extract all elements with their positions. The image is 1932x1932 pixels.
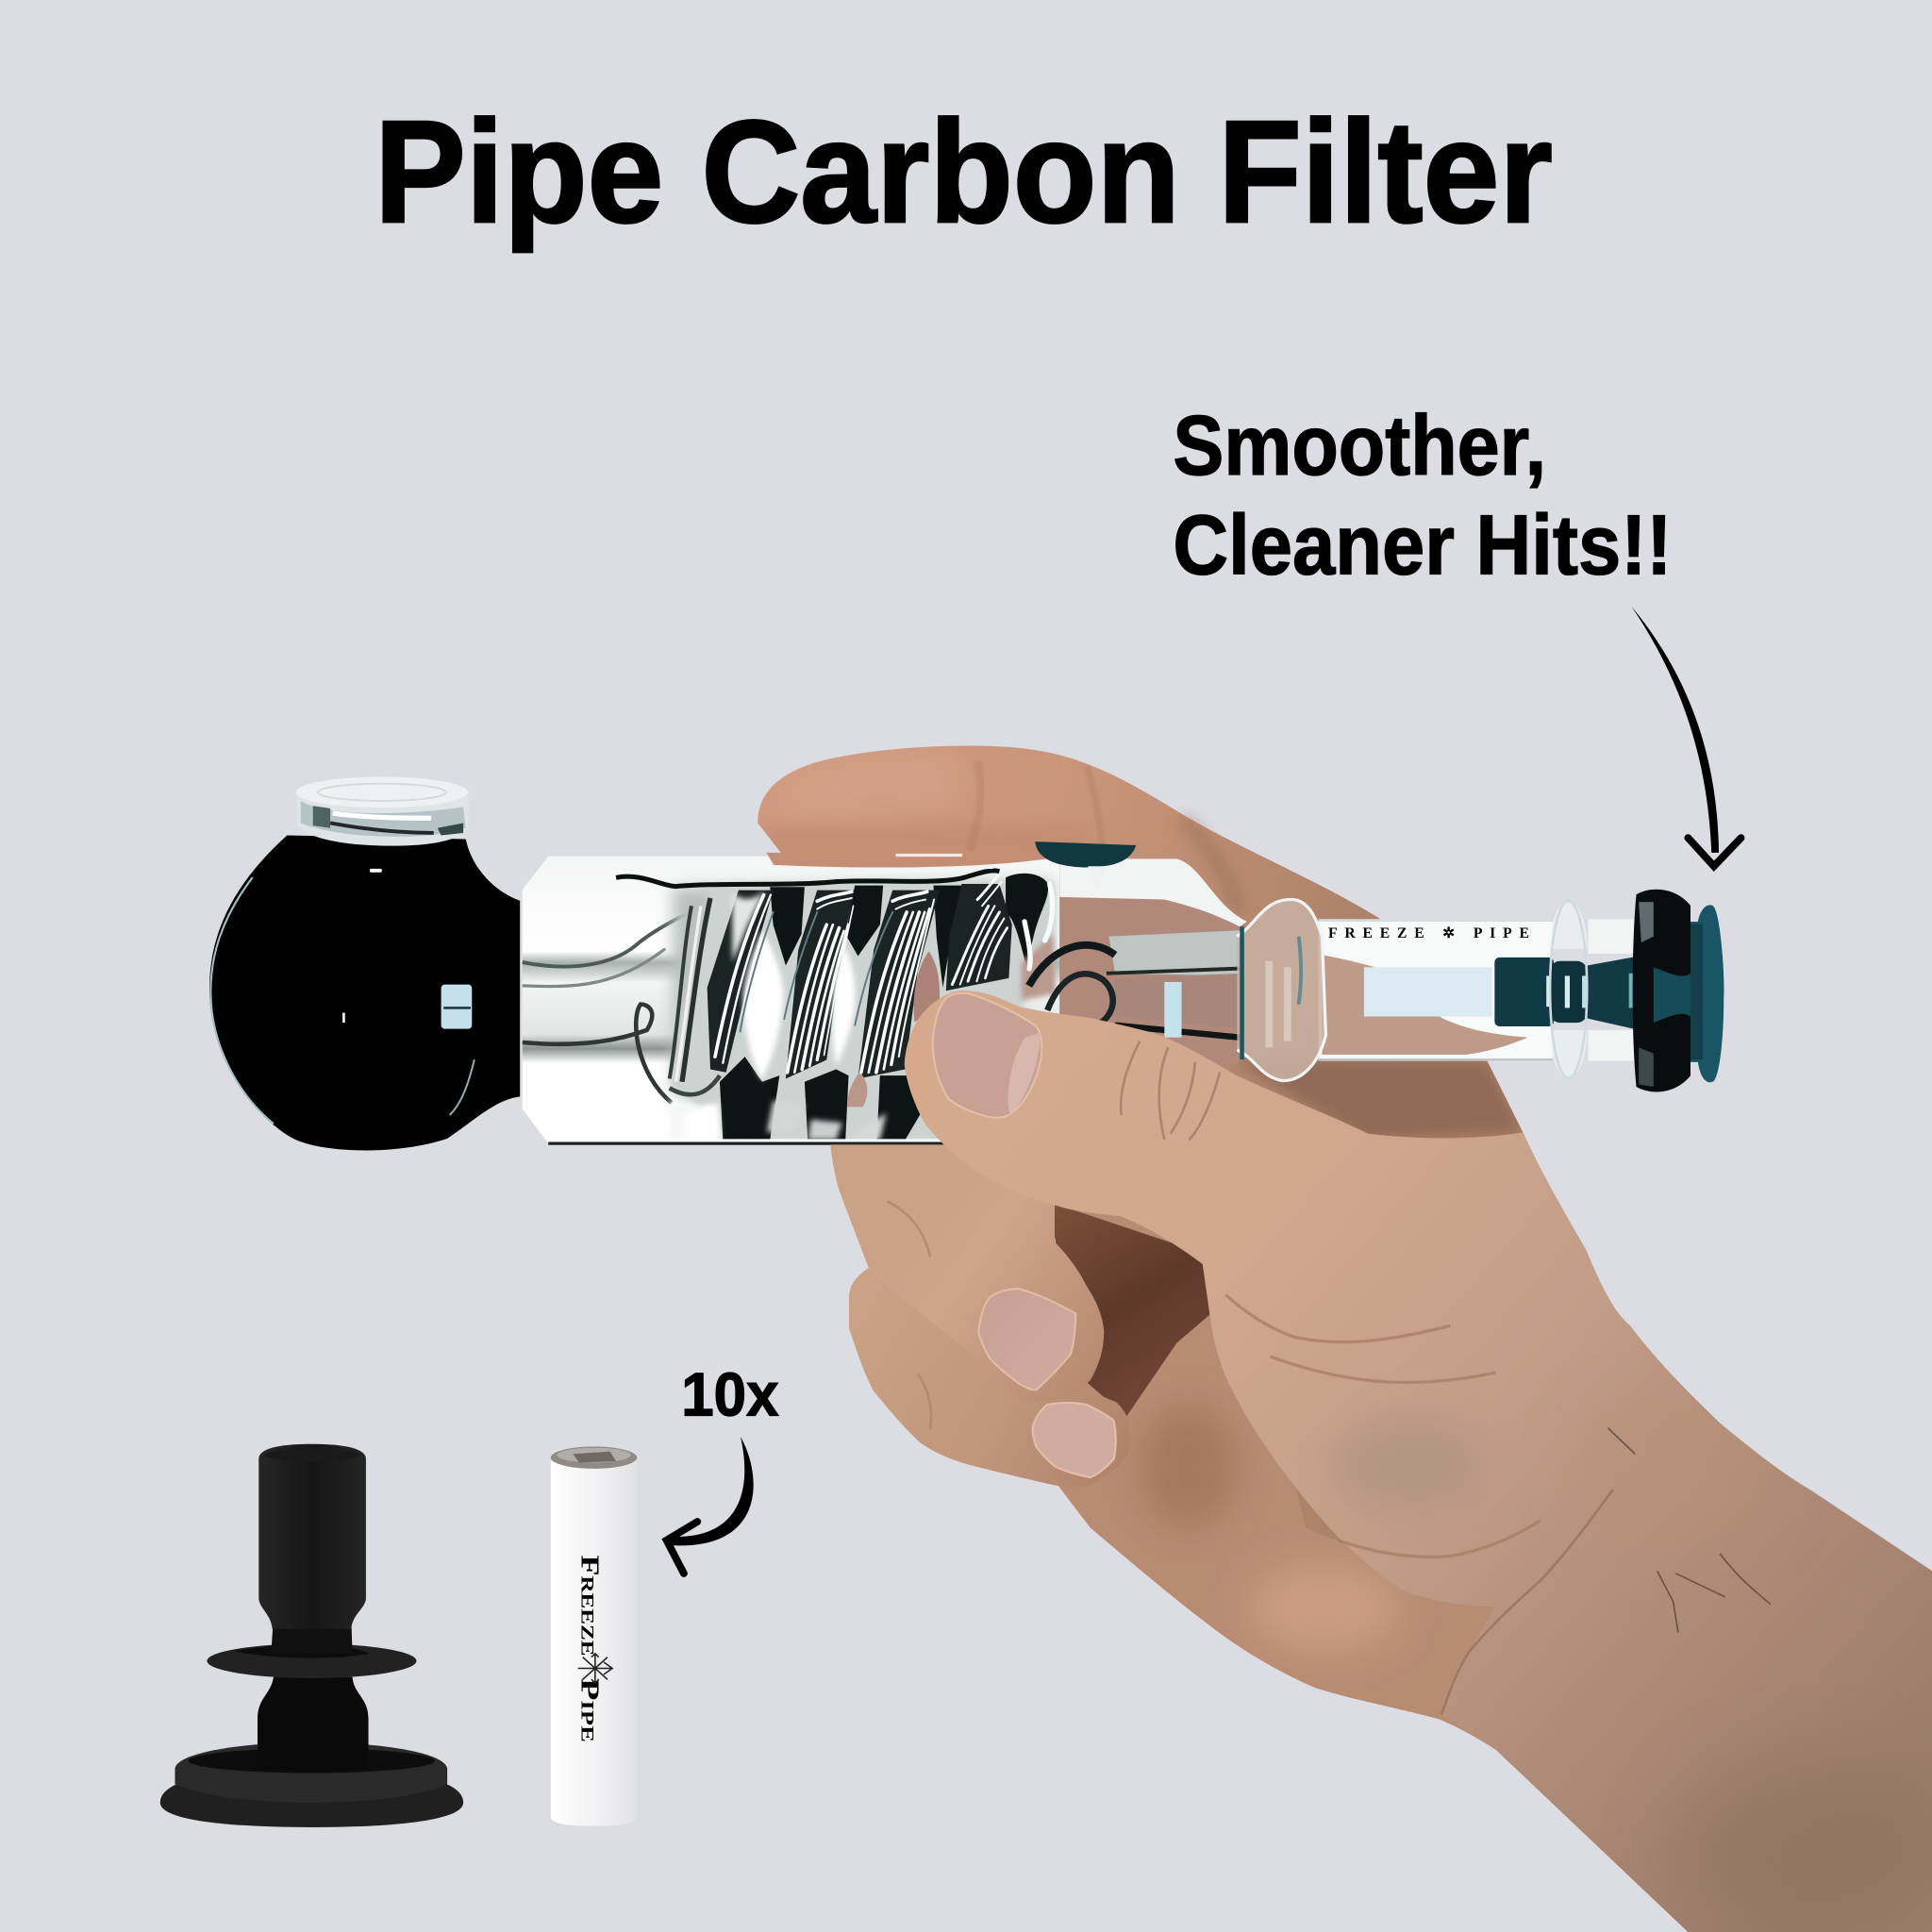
glass coil xyxy=(616,867,1056,1140)
base ring xyxy=(175,1742,447,1803)
lower body xyxy=(258,1677,369,1771)
hand: fingers and palm over the pipe xyxy=(830,991,1932,1932)
white lenses in coil xyxy=(685,891,1056,1140)
accessory: black silicone stopper xyxy=(160,1444,463,1827)
hand: back of hand and index finger behind the pipe xyxy=(758,746,1932,1932)
finger red tone xyxy=(764,828,1072,853)
accessory: carbon filter cartridge xyxy=(551,1446,637,1826)
thumbnail xyxy=(933,993,1041,1118)
skin seen through coil xyxy=(914,952,940,1022)
finger contact over chamber top xyxy=(766,853,1047,868)
filter brand text: Freeze xyxy=(575,1555,604,1656)
finger joints xyxy=(970,761,981,850)
shadow between fingers and palm xyxy=(1047,1201,1220,1417)
pipe xyxy=(209,777,1724,1150)
filter brand text xyxy=(575,1555,604,1742)
skin tone variation xyxy=(1332,1417,1932,1932)
label: 10x: 10x xyxy=(681,1360,778,1429)
arrow: callout to mouthpiece xyxy=(1631,607,1741,866)
palm and thumb xyxy=(905,991,1932,1932)
callout: smoother, cleaner hits: Cleaner Hits!! xyxy=(1173,498,1672,593)
filter brand text: Pipe xyxy=(575,1678,604,1742)
teal-grey glints on strands xyxy=(741,912,892,1031)
silicone stopper xyxy=(1494,957,1639,1030)
mouthpiece tube with hand seen through xyxy=(1319,919,1553,1061)
flange disc xyxy=(207,1643,416,1678)
neck xyxy=(271,1617,353,1654)
mouthpiece disc and teal cap xyxy=(1633,890,1724,1091)
callout: smoother, cleaner hits xyxy=(1173,398,1672,593)
arm hairs xyxy=(1607,1428,1771,1633)
shadow beside stem xyxy=(1232,1059,1523,1140)
neck glass section xyxy=(1029,858,1247,1084)
nail: upper finger xyxy=(978,1289,1075,1390)
nail: lower finger xyxy=(1033,1403,1116,1477)
wrist crease xyxy=(1441,1490,1613,1714)
stem brand text: FREEZE ✲ PIPE xyxy=(1328,925,1529,941)
lower palm tone xyxy=(1059,1353,1495,1749)
white lower-left section xyxy=(670,1101,722,1140)
palm creases xyxy=(1226,1295,1541,1557)
left curved strands xyxy=(670,898,720,1094)
base lip xyxy=(160,1783,463,1827)
dark strand patches xyxy=(720,874,1048,1140)
lower finger xyxy=(849,1268,1130,1488)
glass collar xyxy=(1237,899,1325,1081)
upper cylinder xyxy=(258,1444,366,1629)
carbon filter inside tube xyxy=(1364,967,1492,1017)
coil silver ground xyxy=(673,881,1053,1140)
striped bands xyxy=(708,884,1012,1078)
thumb knuckle wrinkles xyxy=(1121,1041,1220,1140)
bowl: black glass sphere xyxy=(209,836,520,1150)
bowl cap: clear glass xyxy=(295,777,468,846)
carburetor clip xyxy=(1035,841,1136,890)
snowflake logo xyxy=(578,1654,612,1683)
upper finger xyxy=(830,1144,1104,1402)
arrow: 10x to filter xyxy=(667,1437,754,1574)
stripe bands xyxy=(715,874,1052,1073)
glass ring xyxy=(1550,901,1634,1078)
callout: smoother, cleaner hits: Smoother, xyxy=(1173,398,1546,493)
glass chamber with coil xyxy=(523,853,1059,1143)
title: Pipe Carbon Filter xyxy=(375,90,1553,253)
top dark band xyxy=(616,871,999,887)
